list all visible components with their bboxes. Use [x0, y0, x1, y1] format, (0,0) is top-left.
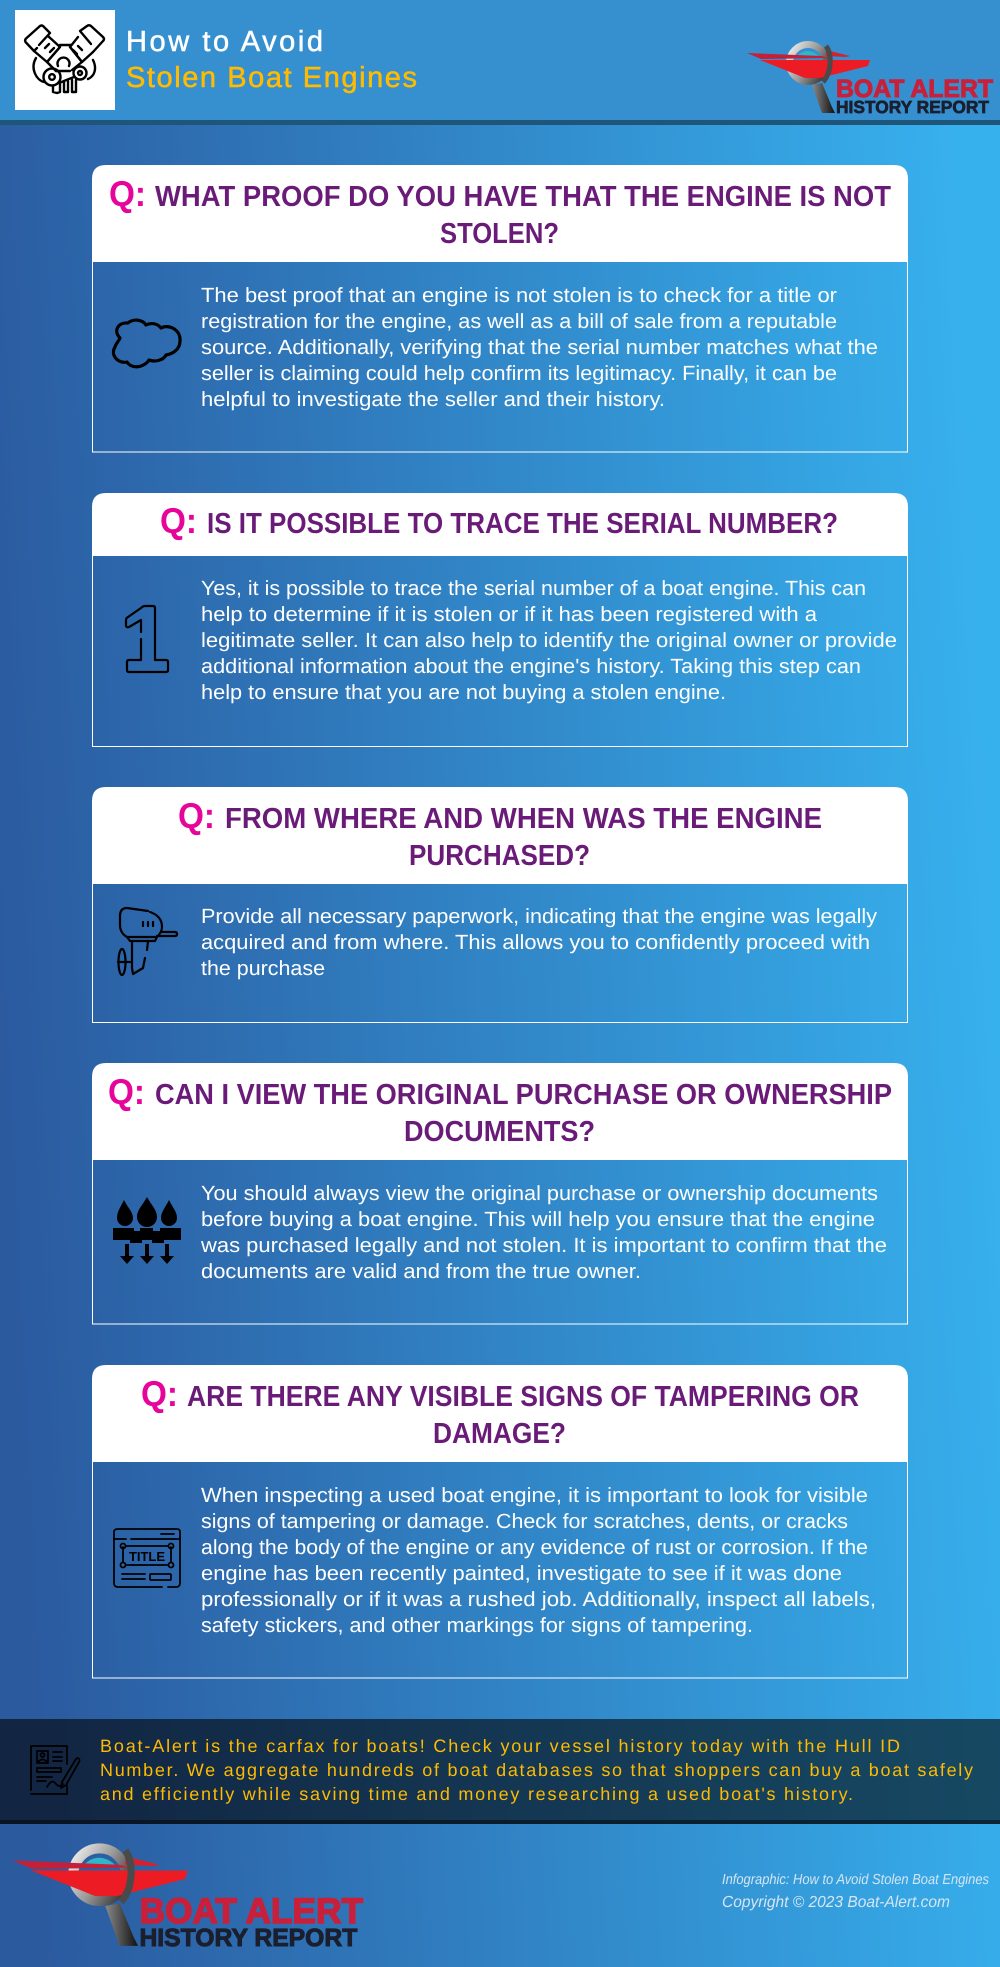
title [126, 26, 417, 94]
footer credit: Copyright © 2023 Boat-Alert.com [722, 1894, 950, 1911]
question heading: Q: [141, 1373, 178, 1414]
callout text: Number. We aggregate hundreds of boat databases so that shoppers can buy a boat safely [100, 1760, 973, 1780]
footer credit [722, 1872, 989, 1911]
question heading: Q: [109, 173, 146, 214]
answer text: source. Additionally, verifying that the serial number matches what the [201, 336, 878, 359]
answer text: helpful to investigate the seller and their history. [201, 388, 665, 411]
answer text [201, 577, 897, 704]
question heading: CAN I VIEW THE ORIGINAL PURCHASE OR OWNERSHIP [155, 1079, 892, 1111]
icon: signed document [31, 1746, 80, 1794]
answer text: registration for the engine, as well as a bill of sale from a reputable [201, 310, 837, 333]
answer text: acquired and from where. This allows you to confidently proceed with [201, 931, 870, 954]
answer text: The best proof that an engine is not stolen is to check for a title or [201, 284, 837, 307]
answer text: additional information about the engine's history. Taking this step can [201, 655, 861, 678]
logo: Boat Alert footer: HISTORY REPORT [139, 1923, 358, 1952]
icon: water drops and filter [113, 1197, 181, 1264]
question heading: Q: [160, 500, 197, 541]
answer text: help to determine if it is stolen or if it has been registered with a [201, 603, 818, 626]
icon: outboard motor [118, 908, 177, 975]
callout text: and efficiently while saving time and money researching a used boat's history. [100, 1784, 853, 1804]
icon: title template [114, 1529, 180, 1587]
answer text: seller is claiming could help confirm its legitimacy. Finally, it can be [201, 362, 837, 385]
answer text: engine has been recently painted, investigate to see if it was done [201, 1562, 842, 1585]
answer text: safety stickers, and other markings for signs of tampering. [201, 1614, 753, 1637]
answer text: documents are valid and from the true owner. [201, 1260, 641, 1283]
answer text [200, 1182, 887, 1283]
answer text: before buying a boat engine. This will help you ensure that the engine [201, 1208, 875, 1231]
panel: view original documents [92, 1063, 908, 1324]
answer text: was purchased legally and not stolen. It is important to confirm that the [200, 1234, 887, 1257]
panel: where and when purchased [92, 787, 908, 1022]
header banner [0, 0, 1000, 125]
icon: engine [15, 10, 115, 110]
question heading: IS IT POSSIBLE TO TRACE THE SERIAL NUMBER? [207, 508, 838, 540]
icon: number one [126, 606, 168, 672]
panel: signs of tampering [92, 1365, 908, 1678]
question heading: WHAT PROOF DO YOU HAVE THAT THE ENGINE IS NOT [155, 181, 891, 213]
panel: proof engine is not stolen [92, 165, 908, 452]
answer text: help to ensure that you are not buying a stolen engine. [201, 681, 726, 704]
answer text: the purchase [201, 957, 325, 980]
question heading [92, 493, 908, 556]
question heading: ARE THERE ANY VISIBLE SIGNS OF TAMPERING OR [187, 1381, 859, 1413]
answer text: When inspecting a used boat engine, it is important to look for visible [201, 1484, 868, 1507]
logo: Boat Alert header: BOAT ALERT [836, 75, 993, 103]
question heading [92, 165, 908, 262]
answer text: along the body of the engine or any evidence of rust or corrosion. If the [201, 1536, 868, 1559]
question heading: Q: [178, 795, 215, 836]
icon: title template: TITLE [129, 1549, 165, 1564]
answer text: professionally or if it was a rushed job. Additionally, inspect all labels, [201, 1588, 876, 1611]
question heading: PURCHASED? [409, 840, 590, 872]
callout text [100, 1736, 973, 1804]
answer text [201, 284, 878, 411]
logo: Boat Alert header [747, 44, 993, 117]
logo: Boat Alert footer [13, 1848, 363, 1952]
answer text: Yes, it is possible to trace the serial number of a boat engine. This can [201, 577, 866, 600]
callout text: Boat-Alert is the carfax for boats! Check your vessel history today with the Hull ID [100, 1736, 900, 1756]
question heading [92, 1365, 908, 1462]
question heading: FROM WHERE AND WHEN WAS THE ENGINE [225, 803, 822, 835]
question heading: DOCUMENTS? [404, 1116, 595, 1148]
answer text: Provide all necessary paperwork, indicating that the engine was legally [201, 905, 878, 928]
question heading [92, 1063, 908, 1160]
logo: Boat Alert footer: BOAT ALERT [139, 1892, 363, 1932]
title: How to Avoid [126, 26, 323, 58]
callout band [0, 1719, 1000, 1824]
icon: cloud [113, 320, 180, 367]
panel: trace serial number [92, 493, 908, 746]
question heading: Q: [108, 1071, 145, 1112]
question heading: DAMAGE? [433, 1418, 566, 1450]
logo: Boat Alert header: HISTORY REPORT [836, 97, 989, 117]
question heading [92, 787, 908, 884]
answer text [201, 905, 878, 980]
title: Stolen Boat Engines [126, 62, 417, 94]
question heading: STOLEN? [440, 218, 559, 250]
answer text [201, 1484, 876, 1637]
answer text: legitimate seller. It can also help to identify the original owner or provide [201, 629, 897, 652]
answer text: signs of tampering or damage. Check for scratches, dents, or cracks [201, 1510, 848, 1533]
answer text: You should always view the original purchase or ownership documents [201, 1182, 878, 1205]
